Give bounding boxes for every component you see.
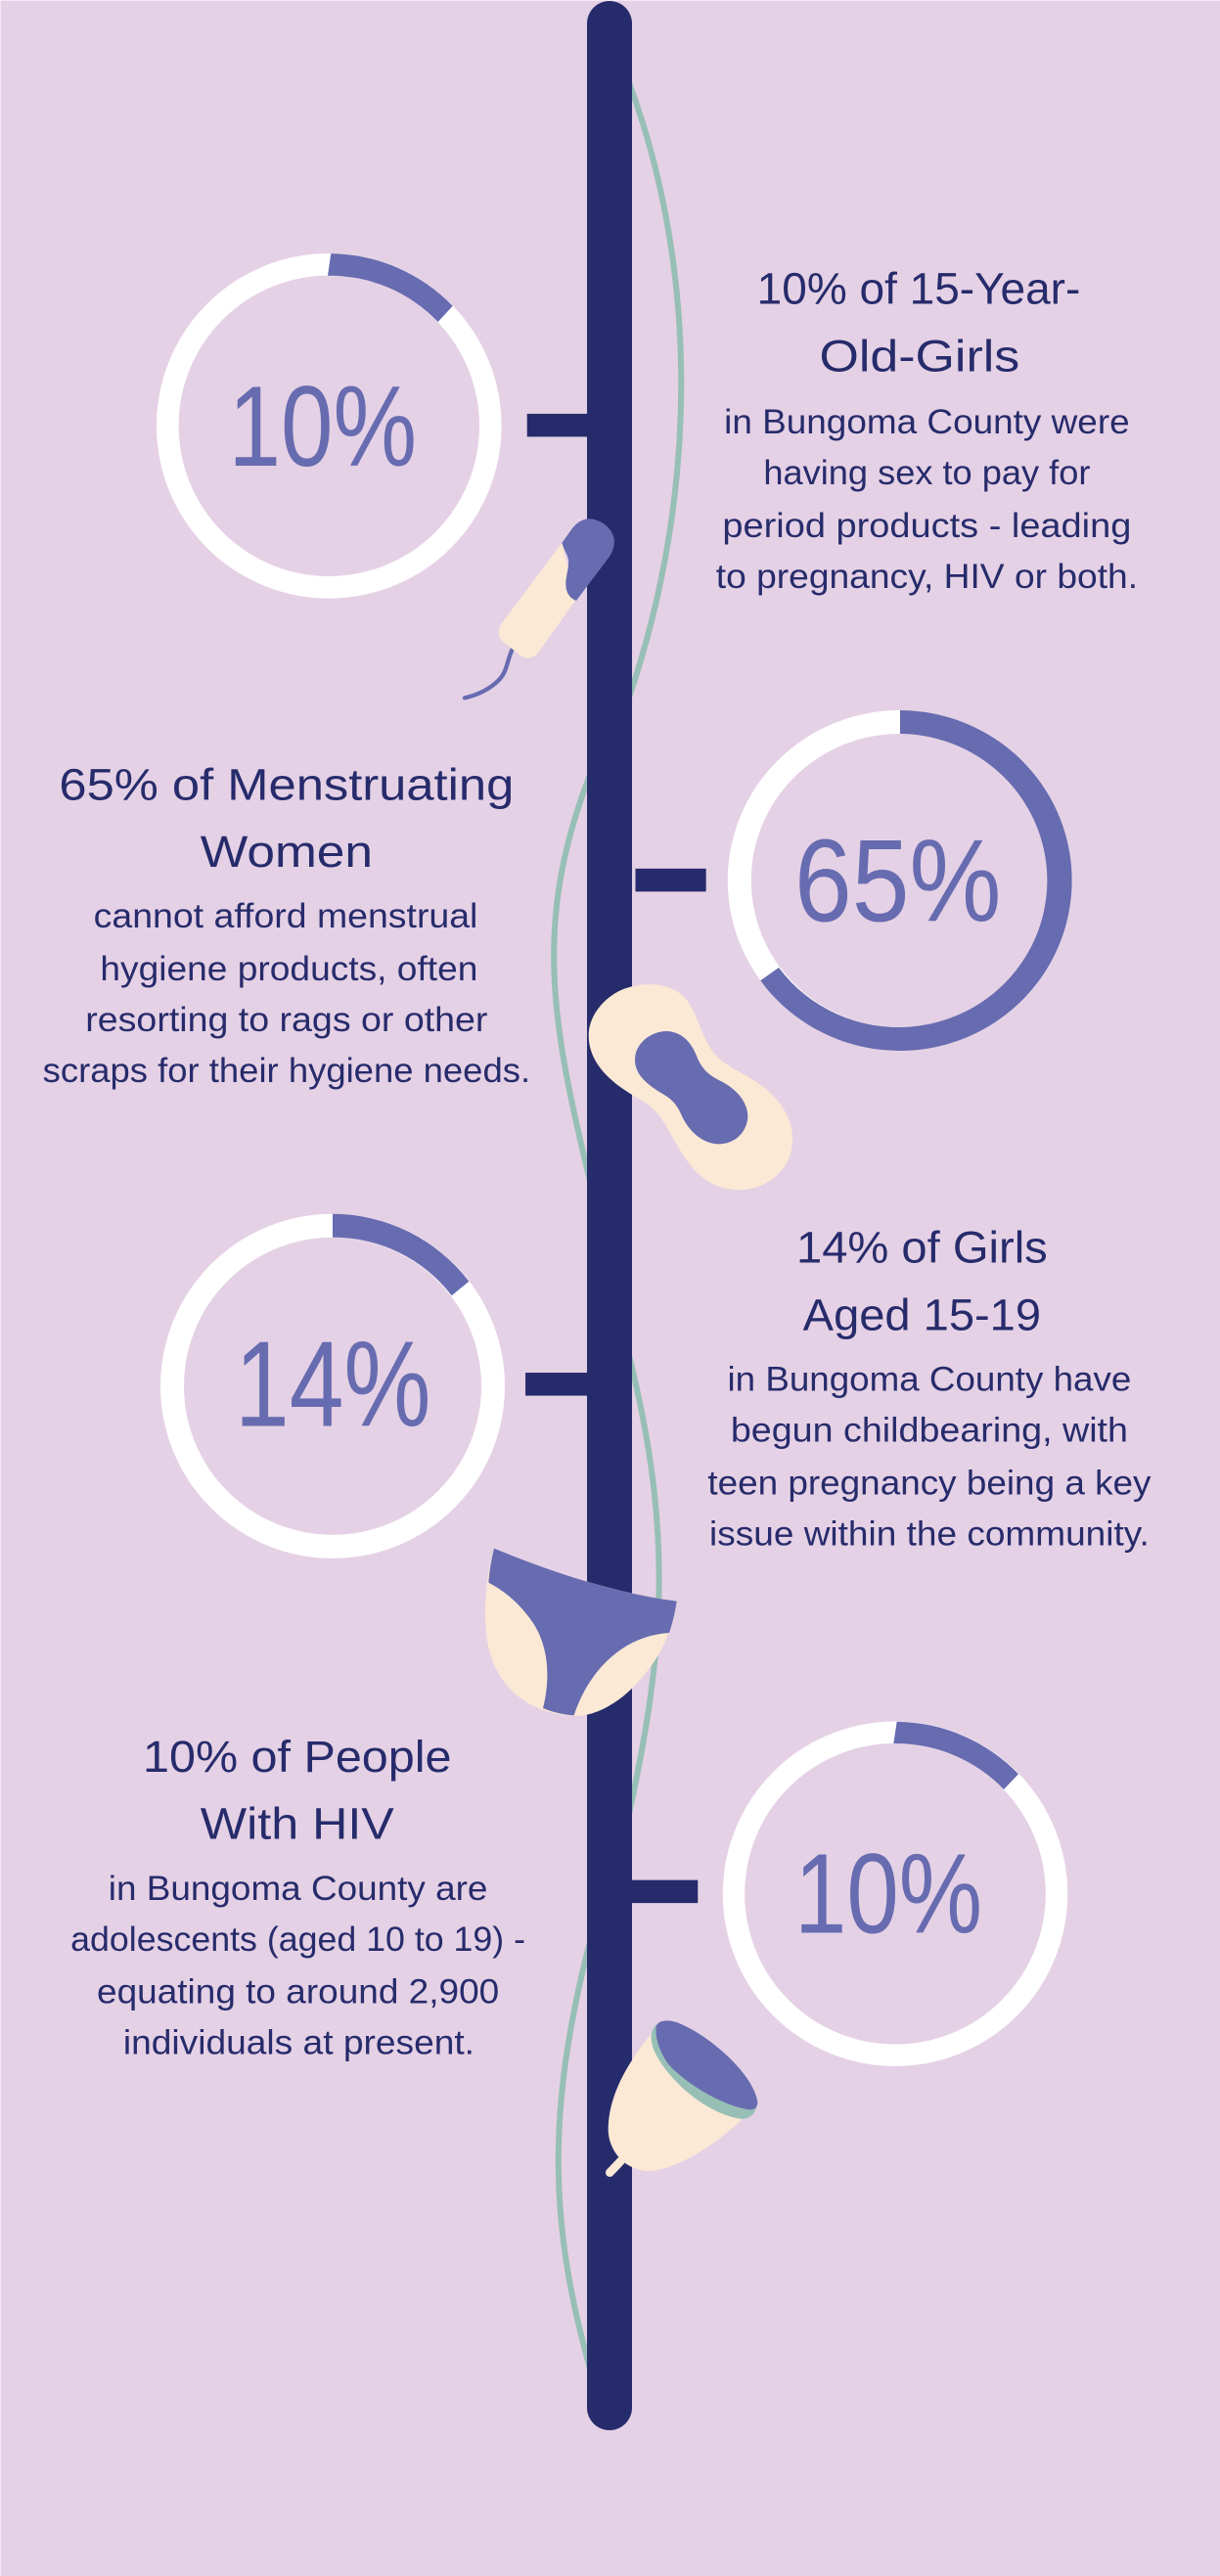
text block: 10% of people with HIV: 10% of People [143,1732,452,1782]
text block: 10% of 15-year-old girls [716,263,1138,596]
text block: 10% of people with HIV: adolescents (aged 10 to 19) - [70,1921,525,1959]
icon: menstrual cup [609,2020,757,2173]
text block: 10% of people with HIV: With HIV [201,1799,395,1849]
text block: 14% of girls aged 15-19: begun childbearing, with [731,1412,1128,1450]
text block: 14% of girls aged 15-19: Aged 15-19 [803,1289,1041,1339]
text block: 10% of 15-year-old girls: Old-Girls [819,331,1019,381]
text block: 14% of girls aged 15-19: in Bungoma County have [727,1361,1131,1399]
text block: 65% of menstruating women: 65% of Menstruating [59,759,514,809]
icon: underwear [485,1549,677,1716]
text block: 65% of menstruating women: resorting to rags or other [85,1001,488,1039]
ring chart: 65% of menstruating women [740,710,1072,1051]
teal vine curves [554,82,681,2373]
icon: tampon [465,519,614,698]
text block: 14% of girls aged 15-19: issue within the community. [709,1514,1150,1553]
ring chart: 10% of 15-year-old girls [167,253,490,587]
text block: 14% of girls aged 15-19: 14% of Girls [796,1223,1048,1273]
text block: 10% of 15-year-old girls: in Bungoma County were [724,403,1130,441]
text block: 10% of people with HIV: equating to around 2,900 [97,1973,499,2011]
text block: 65% of menstruating women [43,759,530,1090]
icon: sanitary pad [589,984,792,1190]
text block: 14% of girls aged 15-19 [707,1223,1152,1553]
text block: 14% of girls aged 15-19: teen pregnancy being a key [707,1464,1152,1502]
text block: 10% of people with HIV: in Bungoma County are [109,1870,487,1908]
ring chart: 10% of people with HIV [734,1722,1057,2056]
timeline bar [587,1,632,2430]
text block: 65% of menstruating women: scraps for their hygiene needs. [43,1052,530,1090]
ring chart: 65% of menstruating women: 65% [794,816,1002,947]
ring chart: 10% of people with HIV: 10% [794,1830,982,1958]
text block: 10% of 15-year-old girls: period products - leading [722,507,1131,545]
text block: 65% of menstruating women: Women [201,827,373,877]
text block: 10% of 15-year-old girls: to pregnancy, HIV or both. [716,558,1138,596]
ring chart: 10% of 15-year-old girls: 10% [229,362,417,490]
text block: 65% of menstruating women: cannot afford menstrual [94,897,477,935]
text block: 10% of 15-year-old girls: having sex to pay for [763,454,1091,492]
text block: 10% of 15-year-old girls: 10% of 15-Year- [757,263,1080,313]
ring chart: 14% of girls: 14% [235,1316,430,1452]
text block: 10% of people with HIV: individuals at present. [123,2024,474,2062]
text block: 65% of menstruating women: hygiene products, often [100,950,477,988]
text block: 10% of people with HIV [70,1732,525,2062]
ring chart: 14% of girls [172,1214,493,1547]
timeline ticks [525,414,706,1903]
